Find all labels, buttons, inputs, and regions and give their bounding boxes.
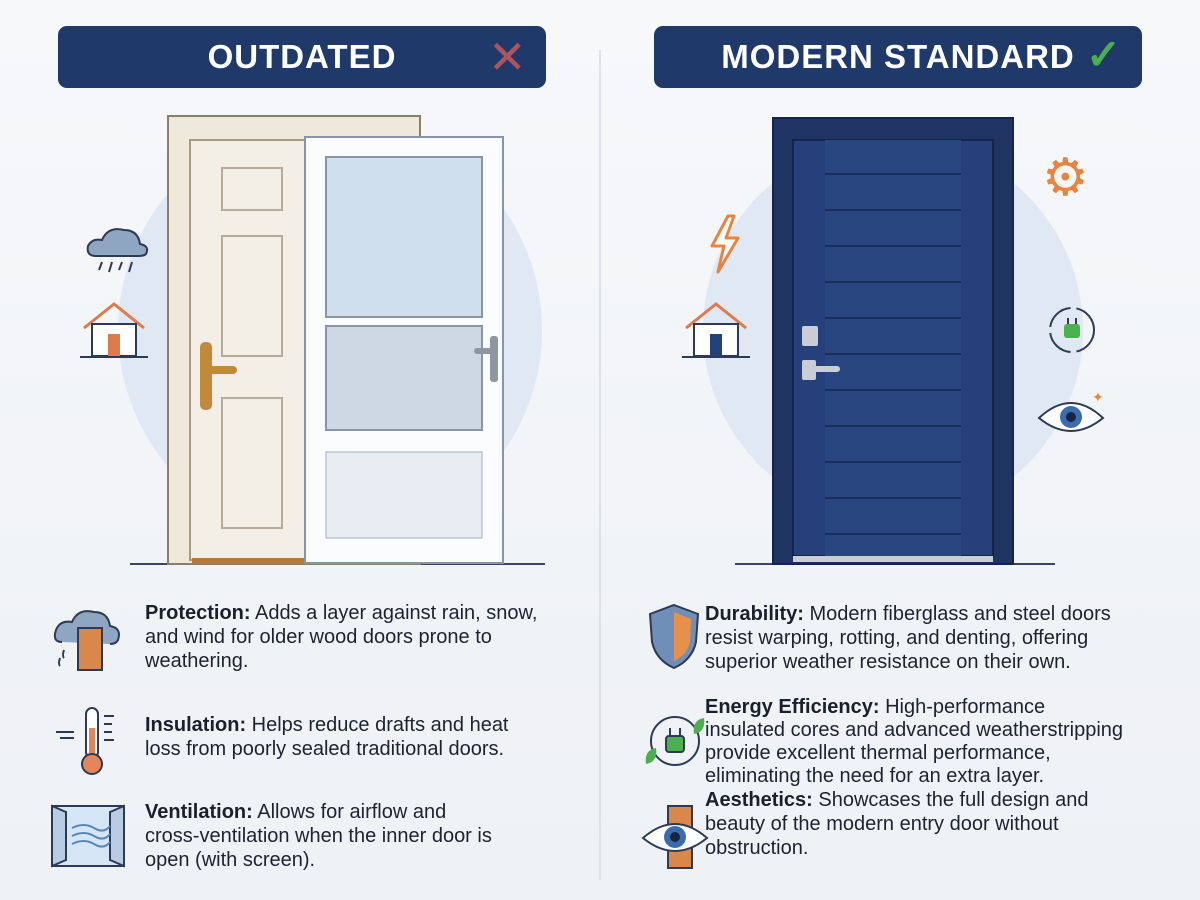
text: insulation: Insulation: Helps reduce drafts and heat (145, 714, 508, 736)
item: ventilation (51, 801, 492, 871)
text: protection (145, 602, 537, 672)
icon: lightning (710, 214, 740, 274)
icon: plug leaves (646, 716, 704, 766)
text: protection: and wind for older wood doors prone to (145, 626, 492, 648)
text: energy efficiency: provide excellent thermal performance, (705, 742, 1051, 764)
text: durability: resist warping, rotting, and denting, offering (705, 627, 1088, 649)
text: ventilation: open (with screen). (145, 849, 315, 871)
header: outdated: ✕ (488, 31, 528, 83)
item: protection (54, 602, 537, 672)
illustration: outdated door with storm door (118, 115, 545, 565)
icon: cloud door (54, 610, 120, 671)
item: aesthetics (642, 789, 1089, 869)
item: durability (648, 603, 1111, 673)
icon: rain cloud (86, 228, 148, 272)
item: energy efficiency (646, 696, 1123, 787)
text: durability: superior weather resistance on their own. (705, 651, 1071, 673)
icon: gear: ⚙ (1042, 149, 1089, 207)
text: energy efficiency: insulated cores and advanced weatherstripping (705, 719, 1123, 741)
icon: eye door (642, 805, 708, 869)
text: insulation: loss from poorly sealed traditional doors. (145, 738, 504, 760)
text: aesthetics: Aesthetics: Showcases the full design and (705, 789, 1089, 811)
text: protection: weathering. (145, 650, 248, 672)
text: ventilation (145, 801, 492, 871)
text: durability (705, 603, 1111, 673)
item: insulation (56, 707, 508, 775)
header: outdated (58, 26, 546, 88)
text: insulation (145, 714, 508, 760)
icon: shield (648, 604, 700, 670)
icon: window (51, 804, 125, 868)
illustration: modern door (703, 117, 1083, 565)
header: modern standard: MODERN STANDARD (721, 38, 1075, 75)
text: energy efficiency (705, 696, 1123, 787)
text: ventilation: cross-ventilation when the inner door is (145, 825, 492, 847)
text: energy efficiency: Energy Efficiency: High-performance (705, 696, 1045, 718)
header: outdated: OUTDATED (208, 38, 396, 75)
icon: house right (682, 302, 750, 358)
icon: plug cycle (1049, 307, 1095, 353)
text: aesthetics: beauty of the modern entry door without (705, 813, 1059, 835)
text: aesthetics: obstruction. (705, 837, 808, 859)
text: protection: Protection: Adds a layer against rain, snow, (145, 602, 537, 624)
header: modern standard (654, 26, 1142, 88)
icon: eye (1038, 392, 1104, 432)
icon: house left (80, 302, 148, 358)
text: durability: Durability: Modern fiberglass and steel doors (705, 603, 1111, 625)
text: aesthetics (705, 789, 1089, 859)
icon: thermometer (56, 707, 114, 775)
text: ventilation: Ventilation: Allows for airflow and (145, 801, 446, 823)
text: energy efficiency: eliminating the need for an extra layer. (705, 765, 1044, 787)
header: modern standard: ✓ (1086, 31, 1122, 78)
divider (599, 50, 601, 880)
